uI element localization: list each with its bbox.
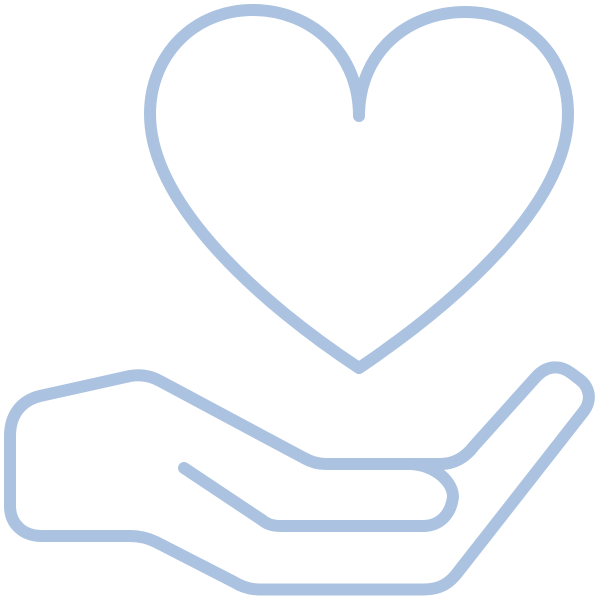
icon: heart [150,10,568,368]
icon: open hand [10,367,589,590]
